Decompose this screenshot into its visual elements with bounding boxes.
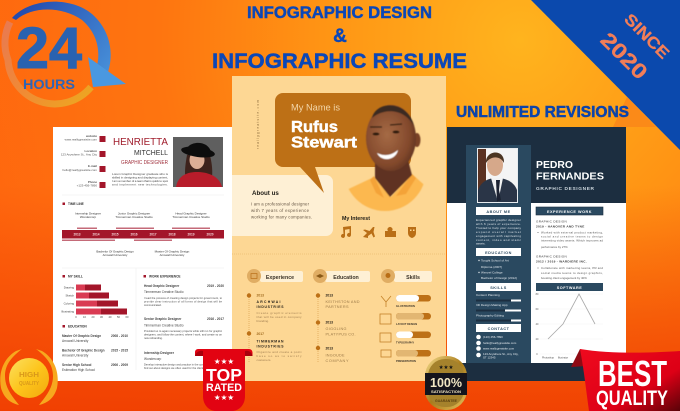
24 hours clock arrow badge: HOURS [23, 76, 75, 92]
education timeline: COMPANY [326, 359, 349, 363]
sidebar: about me [476, 207, 522, 246]
bar chart: skills: 60 [126, 315, 129, 319]
name [113, 136, 168, 166]
timeline chart: 2016 [130, 232, 138, 236]
work experience list: find out about designs we often used for the client. [144, 366, 204, 370]
education timeline: GIGGLING [326, 327, 347, 331]
sidebar: contact: ST 12345 [483, 356, 496, 360]
name: MITCHELL [134, 148, 168, 157]
timeline chart: 2020 [206, 232, 214, 236]
experience timeline: 2017 [256, 332, 264, 336]
icon: plane [363, 227, 375, 238]
about us card: with 7 years of experience [251, 208, 310, 213]
skills bars [380, 295, 431, 363]
skills bars: LAYOUT DESIGN [396, 322, 417, 326]
experience timeline [247, 293, 302, 362]
timeline chart: Bachelor Of Graphic Design [96, 250, 134, 254]
bar chart: skills: 50 [117, 315, 120, 319]
experience timeline: Create graphic elements [256, 311, 302, 315]
timeline chart: Timmerman Creative Studio [172, 215, 210, 219]
profile text: I am a member of a team that is quick to spot [112, 179, 168, 183]
name: GRAPHIC DESIGNER [536, 186, 595, 192]
section headers [247, 269, 432, 283]
software line chart: Illustrator [558, 356, 568, 360]
sidebar: contact: hello@reallygreatsite.com [483, 341, 517, 345]
section headers: Education [333, 275, 359, 281]
name: GRAPHIC DESIGNER [121, 160, 168, 166]
badge: top rated ribbon: ★★★ [214, 357, 234, 366]
experience section: social and creative teams to design [541, 234, 603, 238]
education timeline: PLATYPUS CO. [326, 332, 356, 336]
experience timeline: base so as to satisfy [256, 354, 302, 358]
skills bars: PRESENTATION [396, 359, 416, 363]
corner banner: since 2020 [531, 0, 680, 150]
education list: 2008 - 2010 [111, 334, 128, 338]
work experience list: Internship Designer [144, 351, 175, 355]
experience section: Worked with external product marketing, [541, 230, 603, 234]
work experience list: provide clear instruction of all forms of design that will be [144, 300, 223, 304]
badge: best quality ribbon [571, 349, 680, 411]
sidebar: skills [476, 283, 521, 322]
sidebar: about me: engagement with captivating [476, 234, 521, 238]
24 hours clock arrow badge: 24 [16, 16, 82, 81]
skills bars: ILLUSTRATION [396, 304, 415, 308]
sidebar: about me: assets. [476, 242, 486, 246]
education timeline: 2013 [326, 346, 333, 350]
about us card: About us [252, 190, 279, 197]
badge: top rated ribbon: ★★★ [214, 393, 234, 402]
contact list [61, 134, 106, 188]
sidebar: about me: Experienced graphic designer [476, 218, 521, 222]
experience section: GRAPHIC DESIGN [536, 220, 567, 224]
timeline chart: Timmerman Creative Studio [115, 215, 153, 219]
about us card: I am a professional designer [251, 202, 310, 206]
icon: music note [341, 226, 351, 238]
name: PEDRO [536, 159, 573, 171]
education list: Arrowall University [62, 354, 89, 358]
timeline chart: Wondercorp [80, 215, 96, 219]
sidebar: education: Bachelor of Design (2012) [481, 276, 517, 280]
work experience list: Timmerman Creative Studio [144, 290, 184, 294]
software line chart: 0 [536, 353, 538, 356]
name speech bubble [275, 93, 411, 193]
software line chart: 20 [536, 338, 539, 341]
software line chart: 80 [536, 293, 539, 296]
my interest icons: My Interest [342, 216, 370, 222]
experience timeline: INDUSTRIES [256, 305, 284, 309]
heading: time line: TIME LINE [68, 202, 84, 206]
title: INFOGRAPHIC RESUME [212, 49, 467, 73]
contact list: +123-456-7890 [77, 184, 97, 188]
timeline chart: Junior Graphic Designer [118, 212, 150, 216]
timeline chart: 2019 [187, 232, 195, 236]
experience section: 2019 - HANOVER AND TYNE [536, 224, 585, 228]
bar chart: skills: Drawing [64, 286, 74, 290]
profile text [112, 172, 168, 186]
badge: high quality medal: HIGH [19, 370, 39, 379]
badge: 100% satisfaction seal: GUARANTEE [435, 399, 457, 403]
bar chart: skills: Illustrating [61, 310, 74, 314]
icon: theatre mask [408, 227, 416, 238]
heading: my skill: MY SKILL [68, 274, 83, 278]
section headers: Experience [266, 275, 294, 281]
contact list: hello@reallygreatsite.com [62, 168, 97, 172]
timeline chart: 2013 [73, 232, 81, 236]
education list: Bachelor Of Graphic Design [62, 348, 105, 352]
contact list: 123 Anywhere St., Any City [61, 152, 97, 156]
contact list: Location [84, 149, 97, 153]
bar chart: skills: 10 [83, 315, 86, 319]
sidebar: skills: Photography Editing [476, 314, 504, 318]
experience timeline: branding. [256, 319, 269, 323]
panel: navy resume Pedro Fernandes [447, 127, 626, 381]
timeline chart: Master Of Graphic Design [155, 250, 190, 254]
timeline chart: 2018 [168, 232, 176, 236]
sidebar: contact: (123) 456-7890 [483, 335, 503, 339]
bar chart: skills: 0 [75, 315, 77, 319]
name speech bubble: My Name is [291, 102, 341, 112]
education timeline: 2013 [326, 294, 333, 298]
photo: smiling man [348, 104, 424, 212]
education timeline: INGOUDE [326, 354, 345, 358]
experience section [536, 207, 603, 280]
work experience list: 2016 - 2017 [207, 317, 224, 321]
24 hours clock arrow badge [5, 2, 126, 104]
timeline chart: Head Graphic Designer [175, 212, 207, 216]
sidebar: contact: CONTACT [488, 327, 510, 331]
timeline chart: 2017 [149, 232, 157, 236]
experience section: boosting client engagement by 40% [541, 276, 587, 280]
title: INFOGRAPHIC DESIGN [247, 3, 432, 22]
badge: 100% satisfaction seal [425, 356, 467, 410]
sidebar: contact: www.reallygreatsite.com [483, 346, 515, 350]
education list: 2006 - 2009 [111, 363, 128, 367]
contact list: Phone [88, 180, 97, 184]
icon: puzzle [385, 227, 396, 237]
sidebar: skills: Content Planning [476, 293, 500, 297]
experience timeline: that will be used in company [256, 315, 302, 319]
about us card [232, 175, 333, 236]
work experience list: Senior Graphic Designer [144, 317, 182, 321]
education timeline: 2013 [326, 320, 333, 324]
work experience list [144, 274, 224, 370]
software line chart: 40 [536, 323, 539, 326]
sidebar: education: Tought School of Art [481, 258, 509, 262]
education list: Estimation High School [62, 368, 95, 372]
contact list: www.reallygreatsite.com [65, 138, 98, 142]
timeline chart: Internship Designer [75, 212, 101, 216]
profile text: Lorem Graphic Designer graduate who is [112, 172, 168, 176]
sidebar: education: Diploma (2007) [481, 265, 502, 269]
bar chart: skills: 20 [92, 315, 95, 319]
timeline chart: 2014 [92, 232, 100, 236]
corner banner: since 2020: 2020 [596, 28, 652, 84]
education list: Arrowall University [62, 339, 89, 343]
badge: top rated ribbon: TOP [206, 365, 242, 385]
name: FERNANDES [536, 170, 604, 182]
software line chart: 60 [536, 308, 539, 311]
experience section: EXPERIENCE WORK [547, 210, 592, 214]
heading: unlimited revisions: UNLIMITED REVISIONS [456, 104, 629, 121]
experience section: GRAPHIC DESIGN [536, 254, 567, 258]
sidebar: contact [476, 324, 521, 360]
work experience list: Timmerman Creative Studio [144, 324, 184, 328]
work experience list: 2019 - 2020 [207, 284, 224, 288]
sidebar: skills: 3D Design Making App [476, 303, 508, 307]
timeline chart [62, 212, 224, 257]
work experience list: Provided so to again necessary projects while still run for graphic [144, 329, 223, 333]
timeline chart: Arrowall University [103, 253, 128, 257]
education list [62, 324, 128, 372]
badge: 100% satisfaction seal: ★★★ [439, 364, 453, 371]
bar chart: skills: 40 [109, 315, 112, 319]
education timeline [316, 293, 360, 363]
photo: woman in black hat [172, 136, 224, 188]
contact list: website [85, 134, 97, 138]
work experience list: I lead the process of creating design projects for government, to [144, 296, 223, 300]
sidebar: contact: 123 Anywhere St., Any City, [483, 352, 519, 356]
education timeline: KEITHSTON AND [326, 300, 360, 304]
profile text: and implement new technologies. [112, 182, 168, 186]
sidebar: about me: expand overall market [476, 230, 521, 234]
software line chart: SOFTWARE [557, 286, 582, 290]
education timeline: PARTNERS [326, 305, 349, 309]
sidebar: about me: with 6 years of experience. [476, 222, 521, 226]
timeline chart: 2015 [111, 232, 119, 236]
sidebar: about me: Trusted to help your company [476, 226, 522, 230]
my interest icons [341, 216, 416, 238]
contact list: E-mail [88, 164, 97, 168]
education list: 2015 - 2015 [111, 348, 128, 352]
experience timeline: 2013 [256, 294, 264, 298]
bar chart: skills: Coloring [64, 302, 74, 306]
work experience list: WORK EXPERIENCE [149, 274, 181, 278]
education list: Senior High School [62, 363, 92, 367]
name speech bubble: Stewart [291, 134, 357, 152]
panel: red resume Henrietta [53, 127, 235, 381]
name speech bubble: Rufus [291, 119, 338, 136]
experience section: Collaborate with marketing teams, PR and [541, 266, 603, 270]
badge: 100% satisfaction seal: SATISFACTION [431, 390, 462, 394]
software line chart [536, 283, 603, 360]
experience timeline: INDUSTRIES [256, 344, 284, 348]
experience timeline: customers. [256, 358, 271, 362]
experience timeline: ARCHWAI [256, 300, 281, 304]
work experience list: designers, and follow the content, where I work, and create so on [144, 332, 223, 336]
sidebar: education: EDUCATION [485, 251, 512, 255]
bar chart: skills: 30 [100, 315, 103, 319]
name [536, 159, 604, 192]
work experience list: Wondercorp [144, 357, 162, 361]
about us card: working for many companies. [251, 214, 312, 220]
sidebar: education [476, 248, 521, 280]
bar chart: skills [61, 284, 129, 319]
skills bars: TYPOGRAPHY [396, 340, 414, 344]
work experience list: Develop interactive design and practice in the company [144, 362, 211, 366]
experience timeline: Organize and create a point [256, 350, 302, 354]
vertical website text: reallygreatsite.com [256, 100, 260, 149]
timeline chart: Arrowall University [160, 253, 185, 257]
sidebar: about me: content, video and static [476, 238, 522, 242]
experience section: social media teams to design graphics, [541, 271, 603, 275]
sidebar: education: Wenzel College [481, 270, 503, 274]
work experience list: communicated. [144, 303, 162, 307]
work experience list: Head Graphic Designer [144, 284, 180, 288]
bar chart: skills: Sketch [65, 294, 74, 298]
sidebar: about me: ABOUT ME [486, 210, 511, 214]
title [212, 3, 467, 73]
education list: Master Of Graphic Design [62, 334, 101, 338]
experience section: 2012 / 2019 - WARDIERE INC. [536, 260, 587, 264]
badge: top rated ribbon [195, 349, 252, 411]
photo: man in suit [477, 148, 518, 203]
name: HENRIETTA [113, 136, 168, 148]
education list: EDUCATION [68, 324, 87, 328]
corner banner: since 2020: SINCE [620, 11, 672, 63]
experience timeline: TIMMERMAN [256, 340, 284, 344]
badge: high quality medal: QUALITY [19, 381, 40, 387]
badge: 100% satisfaction seal: 100% [430, 375, 462, 390]
work experience list: new rebranding. [144, 336, 163, 340]
panel: orange resume Rufus Stewart [232, 76, 446, 381]
section headers: Skills [406, 275, 420, 281]
title: & [333, 26, 347, 47]
badge: top rated ribbon: RATED [206, 382, 242, 394]
sidebar: skills: SKILLS [490, 286, 507, 290]
badge: high quality medal [0, 349, 58, 405]
profile text: skilled in designing and displaying content, [112, 176, 168, 180]
software line chart: Photoshop [542, 356, 555, 360]
experience section: performance by 27% [541, 245, 568, 249]
experience section: interesting video assets. Which improves ad [541, 238, 603, 242]
